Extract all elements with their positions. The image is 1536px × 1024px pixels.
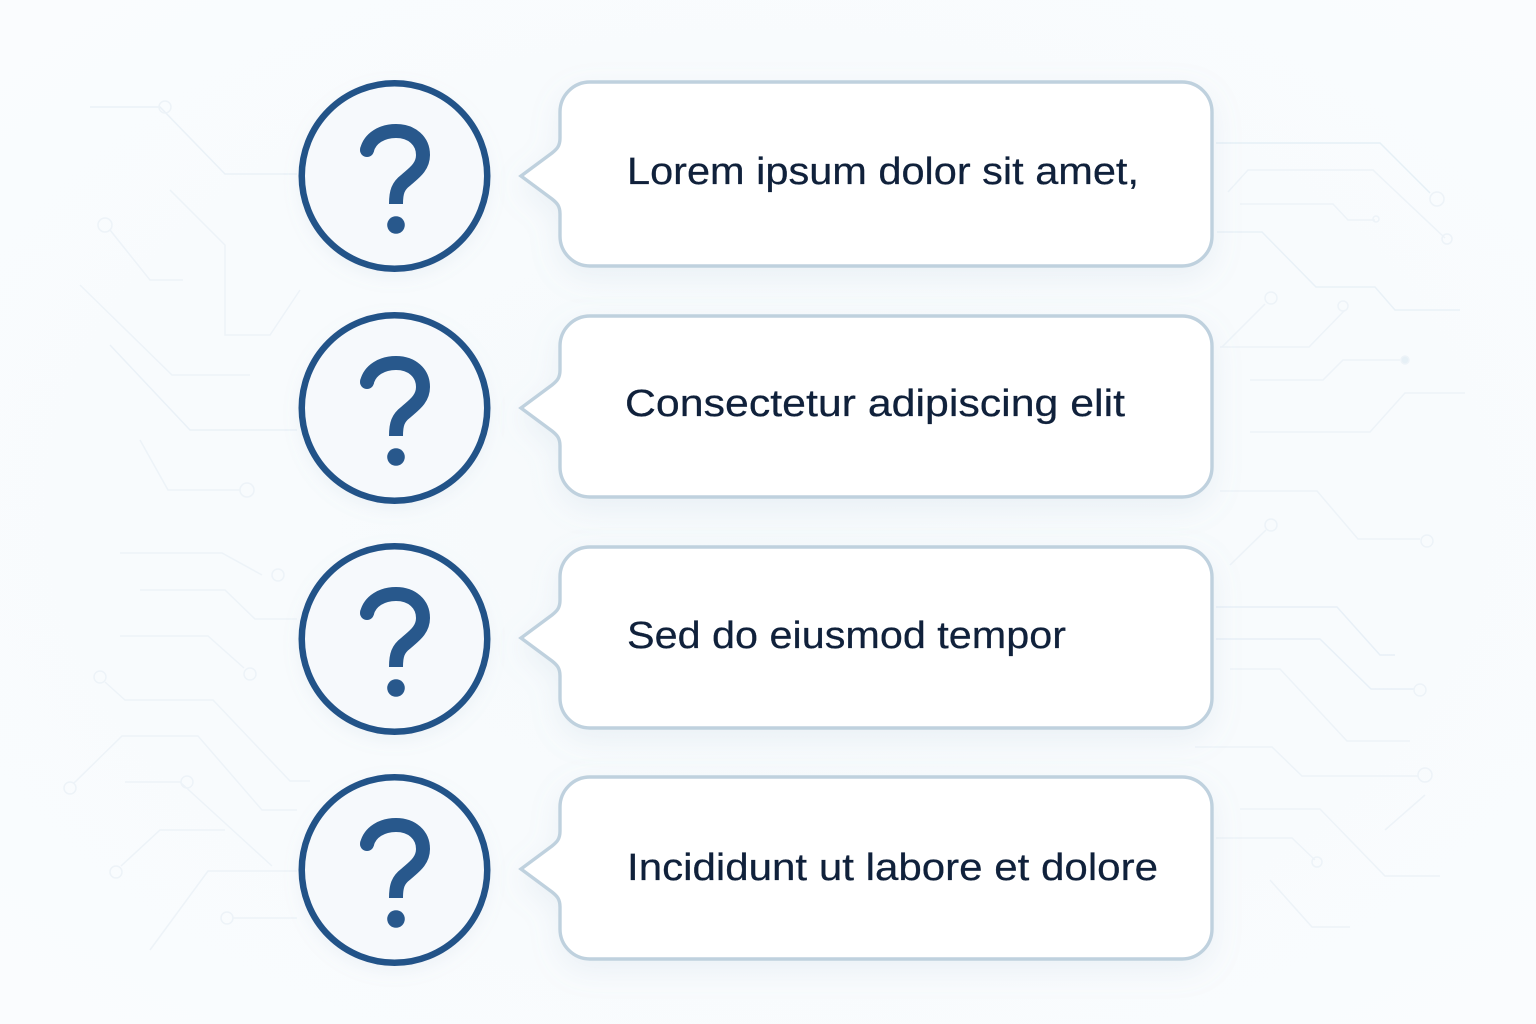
bubble text 4: Incididunt ut labore et dolore bbox=[627, 847, 1158, 889]
icon: question mark circle 2 bbox=[302, 315, 487, 501]
item 2 bbox=[302, 315, 1212, 501]
icon: question mark circle 3 bbox=[302, 546, 487, 732]
icon: question mark circle 4 bbox=[302, 777, 487, 963]
bubble text 2: Consectetur adipiscing elit bbox=[625, 383, 1125, 425]
item 3 bbox=[302, 546, 1212, 732]
bubble text 3: Sed do eiusmod tempor bbox=[627, 615, 1066, 657]
speech bubble 3 bbox=[521, 547, 1212, 728]
speech bubble 4 bbox=[521, 777, 1212, 959]
background circuit pattern bbox=[64, 101, 1465, 950]
speech bubble 2 bbox=[521, 316, 1212, 497]
icon: question mark circle 1 bbox=[302, 83, 487, 269]
item 1 bbox=[302, 82, 1212, 269]
item 4 bbox=[302, 777, 1212, 963]
bubble text 1: Lorem ipsum dolor sit amet, bbox=[627, 151, 1139, 193]
speech bubble 1 bbox=[521, 82, 1212, 266]
